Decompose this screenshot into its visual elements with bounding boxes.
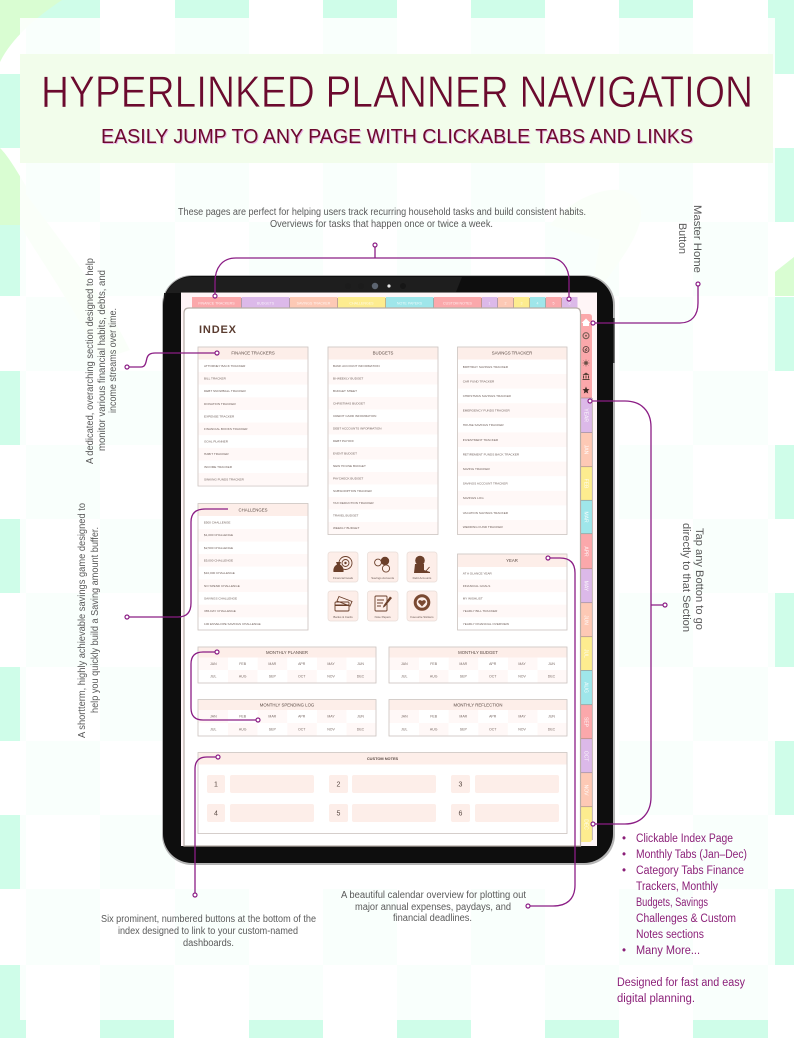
panel: monthly planner: MONTHLY PLANNER bbox=[266, 650, 308, 655]
top tabs bbox=[192, 297, 578, 309]
side tabs: NOV bbox=[582, 785, 588, 796]
panel: custom notes: 2 bbox=[337, 782, 341, 788]
feature list: Monthly Tabs (Jan–Dec) bbox=[636, 849, 747, 861]
panel: monthly planner: JUL bbox=[210, 675, 216, 679]
panel: monthly spending log: JUL bbox=[210, 728, 216, 732]
panel: finance trackers: DONATION TRACKER bbox=[204, 402, 236, 406]
caption: year overview: A beautiful calendar overview for plotting out bbox=[341, 890, 526, 901]
panel: monthly spending log: MONTHLY SPENDING LOG bbox=[260, 702, 315, 707]
panel: monthly planner: SEP bbox=[269, 675, 276, 679]
top caption bbox=[178, 207, 586, 230]
icon button: debt accounts bbox=[407, 552, 437, 582]
feature list: Challenges & Custom bbox=[636, 913, 736, 925]
caption: finance trackers: income streams over time. bbox=[108, 308, 119, 413]
panel: challenges: $500 CHALLENGE bbox=[204, 520, 230, 524]
panel: monthly reflection: DEC bbox=[548, 728, 556, 732]
closing note: Designed for fast and easy bbox=[617, 977, 745, 989]
panel: year: AT A GLANCE YEAR bbox=[463, 571, 493, 575]
panel: monthly planner: AUG bbox=[239, 675, 247, 679]
panel: custom notes: 6 bbox=[459, 810, 463, 818]
connector: custom notes bbox=[193, 755, 220, 897]
top caption: Overviews for tasks that happen once or twice a week. bbox=[270, 219, 493, 230]
panel: monthly reflection: AUG bbox=[430, 728, 438, 732]
top caption: These pages are perfect for helping users track recurring household tasks and build consistent habits. bbox=[178, 207, 586, 218]
index page bbox=[184, 308, 580, 846]
panel: challenges: 365-DAY CHALLENGE bbox=[204, 609, 236, 613]
panel: savings tracker: CAR FUND TRACKER bbox=[463, 379, 495, 383]
panel: finance trackers: BILL TRACKER bbox=[204, 376, 227, 380]
panel: monthly planner: OCT bbox=[298, 675, 306, 679]
panel: monthly planner: DEC bbox=[357, 675, 365, 679]
panel: savings tracker: EMERGENCY FUNDS TRACKER bbox=[463, 409, 510, 413]
icon button: debt accounts: Debt Accounts bbox=[413, 576, 432, 580]
side tabs: MAY bbox=[582, 581, 588, 592]
caption: master home button bbox=[676, 205, 703, 273]
side tabs: AUG bbox=[582, 682, 588, 693]
tablet bbox=[162, 275, 615, 865]
panel: finance trackers: ATTORNEY BACK TRACKER bbox=[204, 364, 246, 368]
closing note: digital planning. bbox=[617, 993, 695, 1005]
panel: year bbox=[458, 554, 567, 630]
panel: budgets: TAX DEDUCTION TRACKER bbox=[333, 501, 374, 505]
panel: monthly reflection: MAY bbox=[518, 715, 526, 719]
feature list: Trackers, Monthly bbox=[636, 881, 718, 893]
panel: monthly budget: SEP bbox=[460, 675, 467, 679]
caption: custom notes: index designed to link to your custom-named bbox=[118, 926, 298, 937]
connector: monthly pages bbox=[191, 650, 260, 722]
panel: monthly budget: JUL bbox=[401, 675, 407, 679]
panel: budgets: CHRISTMAS BUDGET bbox=[333, 401, 365, 405]
panel: monthly planner: JUN bbox=[357, 662, 364, 666]
caption: challenges: help you quickly build a Saving amount buffer. bbox=[90, 527, 101, 713]
panel: monthly spending log: JUN bbox=[357, 715, 364, 719]
caption: custom notes: dashboards. bbox=[183, 938, 234, 949]
panel: custom notes: CUSTOM NOTES bbox=[367, 756, 399, 761]
caption: challenges: A shortterm, highly achievable savings game designed to bbox=[77, 503, 88, 738]
panel: budgets: BI-WEEKLY BUDGET bbox=[333, 377, 363, 381]
panel: savings tracker: INVESTMENT TRACKER bbox=[463, 438, 499, 442]
panel: budgets bbox=[328, 347, 438, 534]
panel: monthly planner: MAR bbox=[268, 662, 277, 666]
panel: monthly budget: FEB bbox=[430, 662, 438, 666]
panel: monthly spending log: AUG bbox=[239, 728, 247, 732]
feature list: Category Tabs Finance bbox=[636, 865, 744, 877]
panel: challenges bbox=[198, 504, 308, 630]
panel: savings tracker: CHRISTMAS SAVINGS TRACKER bbox=[463, 394, 512, 398]
panel: savings tracker: VACATION SAVINGS TRACKER bbox=[463, 511, 509, 515]
panel: monthly budget: DEC bbox=[548, 675, 556, 679]
panel: finance trackers: EXPENSE TRACKER bbox=[204, 414, 235, 418]
caption: section tabs bbox=[680, 523, 705, 632]
panel: budgets: BUDGET SHEET bbox=[333, 389, 357, 393]
panel: challenges: SAVINGS CHALLENGE bbox=[204, 596, 237, 600]
panel: challenges: $1,000 CHALLENGE bbox=[204, 533, 233, 537]
feature list: Notes sections bbox=[636, 929, 704, 941]
panel: savings tracker: SAVINGS LOG bbox=[463, 496, 484, 500]
panel: budgets: PAYCHECK BUDGET bbox=[333, 476, 363, 480]
panel: monthly reflection: MAR bbox=[459, 715, 468, 719]
panel: monthly reflection: SEP bbox=[460, 728, 467, 732]
panel: monthly planner: JAN bbox=[210, 662, 217, 666]
panel: finance trackers: HABIT TRACKER bbox=[204, 452, 229, 456]
connector: finance trackers bbox=[125, 351, 219, 369]
panel: monthly spending log: MAR bbox=[268, 715, 277, 719]
panel: monthly reflection: MONTHLY REFLECTION bbox=[453, 702, 503, 707]
panel: budgets: WEEKLY BUDGET bbox=[333, 526, 359, 530]
caption: year overview: financial deadlines. bbox=[393, 913, 472, 924]
panel: finance trackers: SINKING FUNDS TRACKER bbox=[204, 478, 245, 482]
panel: monthly reflection: OCT bbox=[489, 728, 497, 732]
side tabs: YEAR bbox=[582, 408, 588, 422]
panel: monthly budget: AUG bbox=[430, 675, 438, 679]
panel: budgets: BANK ACCOUNT INFORMATION bbox=[333, 364, 380, 368]
panel: budgets: DEBT PAYOFF bbox=[333, 439, 354, 443]
panel: monthly reflection: JUN bbox=[548, 715, 555, 719]
panel: monthly planner: MAY bbox=[327, 662, 335, 666]
panel: finance trackers bbox=[198, 347, 308, 486]
feature list: Many More... bbox=[636, 945, 700, 957]
panel: monthly reflection: JUL bbox=[401, 728, 407, 732]
panel: custom notes: 5 bbox=[337, 810, 341, 818]
top tabs: NOTE PAPERS bbox=[397, 302, 423, 306]
panel: budgets: DEBT ACCOUNTS INFORMATION bbox=[333, 426, 382, 430]
top tabs: 5 bbox=[552, 302, 554, 306]
panel: monthly reflection: JAN bbox=[401, 715, 408, 719]
connector: year bbox=[526, 556, 575, 908]
feature list: • bbox=[622, 865, 626, 877]
panel: year: FINANCIAL GOALS bbox=[463, 584, 490, 588]
top tabs: 2 bbox=[504, 302, 506, 306]
panel: budgets: EVENT BUDGET bbox=[333, 451, 357, 455]
feature list: • bbox=[622, 833, 626, 845]
panel: savings tracker: SAVINGS ACCOUNT TRACKER bbox=[463, 481, 509, 485]
top tabs: BUDGETS bbox=[257, 302, 275, 306]
panel: finance trackers: GOAL PLANNER bbox=[204, 440, 229, 444]
panel: challenges: 100 ENVELOPE SAVINGS CHALLENGE bbox=[204, 622, 261, 626]
icon button: banks and cards: Banks & Cards bbox=[333, 615, 353, 619]
caption: year overview: major annual expenses, paydays, and bbox=[355, 902, 511, 913]
panel: monthly planner: NOV bbox=[327, 675, 335, 679]
icon button: savings accounts bbox=[368, 552, 398, 582]
caption: finance trackers: A dedicated, overarching section designed to help bbox=[85, 258, 96, 464]
panel: savings tracker: SAVING TRACKER bbox=[463, 467, 491, 471]
caption: section tabs: Tap any Botton to go bbox=[693, 528, 705, 630]
panel: monthly budget bbox=[389, 647, 567, 683]
panel: savings tracker: RETIREMENT FUNDS BACK TRACKER bbox=[463, 452, 520, 456]
top tabs: CHALLENGES bbox=[349, 302, 374, 306]
side tabs: OCT bbox=[582, 751, 588, 761]
side tabs: DEC bbox=[582, 819, 588, 830]
feature list: Clickable Index Page bbox=[636, 833, 733, 845]
side tabs: JAN bbox=[582, 445, 588, 455]
panel: challenges: $5,000 CHALLENGE bbox=[204, 558, 233, 562]
feature list bbox=[622, 833, 747, 957]
panel: monthly reflection: FEB bbox=[430, 715, 438, 719]
panel: monthly budget: OCT bbox=[489, 675, 497, 679]
panel: monthly budget: MAR bbox=[459, 662, 468, 666]
panel: budgets: TRAVEL BUDGET bbox=[333, 514, 359, 518]
connector: master home bbox=[591, 282, 700, 325]
panel: monthly spending log: MAY bbox=[327, 715, 335, 719]
panel: monthly spending log: APR bbox=[298, 715, 306, 719]
caption: custom notes: Six prominent, numbered buttons at the bottom of the bbox=[101, 914, 316, 925]
panel: custom notes: 1 bbox=[214, 782, 218, 788]
panel: monthly spending log: OCT bbox=[298, 728, 306, 732]
panel: monthly reflection bbox=[389, 700, 567, 736]
panel: monthly spending log: SEP bbox=[269, 728, 276, 732]
panel: monthly spending log: NOV bbox=[327, 728, 335, 732]
panel: budgets: BUDGETS bbox=[373, 351, 394, 356]
panel: monthly budget: NOV bbox=[518, 675, 526, 679]
panel: monthly budget: MONTHLY BUDGET bbox=[458, 650, 498, 655]
top tabs: 4 bbox=[536, 302, 538, 306]
icon button: banks and cards bbox=[328, 591, 358, 621]
subtitle: EASILY JUMP TO ANY PAGE WITH CLICKABLE TABS AND LINKS bbox=[101, 125, 693, 148]
icon button: favourite stickers bbox=[407, 591, 437, 621]
screen bbox=[181, 292, 597, 846]
panel: monthly budget: JAN bbox=[401, 662, 408, 666]
panel: monthly planner: FEB bbox=[239, 662, 247, 666]
panel: finance trackers: FINANCIAL BOOKS TRACKER bbox=[204, 427, 248, 431]
caption: section tabs: directly to that Section bbox=[680, 523, 692, 632]
feature list: • bbox=[622, 849, 626, 861]
caption: master home button: Button bbox=[676, 223, 688, 254]
panel: savings tracker: SAVINGS TRACKER bbox=[492, 351, 532, 356]
icon button: financial goals bbox=[328, 552, 358, 582]
panel: year: YEARLY FINANCIAL OVERVIEW bbox=[463, 622, 509, 626]
caption: finance trackers bbox=[85, 258, 119, 464]
connector: top tabs bbox=[213, 243, 571, 301]
icon button: favourite stickers: Favourite Stickers bbox=[410, 615, 434, 619]
caption: custom notes bbox=[101, 914, 316, 949]
panel: monthly budget: JUN bbox=[548, 662, 555, 666]
top tabs: SAVINGS TRACKER bbox=[297, 302, 331, 306]
icon button: note papers: Note Papers bbox=[375, 615, 391, 619]
side tabs: FEB bbox=[582, 479, 588, 489]
caption: year overview bbox=[341, 890, 526, 924]
panel: monthly spending log: FEB bbox=[239, 715, 247, 719]
side tabs: JUL bbox=[582, 649, 588, 658]
panel: monthly reflection: NOV bbox=[518, 728, 526, 732]
panel: savings tracker: HOUSE SAVINGS TRACKER bbox=[463, 423, 504, 427]
panel: custom notes bbox=[198, 752, 567, 834]
panel: monthly budget: MAY bbox=[518, 662, 526, 666]
panel: monthly reflection: APR bbox=[489, 715, 497, 719]
index heading: INDEX bbox=[199, 324, 237, 336]
caption: master home button: Master Home bbox=[691, 205, 703, 273]
panel: monthly planner bbox=[198, 647, 376, 683]
panel: year: YEAR bbox=[506, 558, 518, 563]
panel: finance trackers: FINANCE TRACKERS bbox=[231, 351, 275, 356]
panel: challenges: $2,500 CHALLENGE bbox=[204, 546, 233, 550]
icon button: savings accounts: Savings Accounts bbox=[371, 576, 395, 580]
panel: custom notes: 4 bbox=[214, 810, 218, 818]
panel: monthly spending log bbox=[198, 700, 376, 736]
panel: year: YEARLY BILL TRACKER bbox=[463, 609, 498, 613]
panel: challenges: NO SPEND CHALLENGE bbox=[204, 584, 240, 588]
side tabs bbox=[580, 314, 592, 842]
panel: monthly spending log: DEC bbox=[357, 728, 365, 732]
panel: custom notes: 3 bbox=[459, 782, 463, 788]
panel: savings tracker bbox=[458, 347, 567, 534]
camera bbox=[345, 283, 406, 289]
closing note bbox=[617, 977, 745, 1005]
background: pale green swooshes bbox=[0, 0, 794, 360]
side tab icons bbox=[582, 318, 590, 394]
panel: budgets: CREDIT CARD INFORMATION bbox=[333, 414, 376, 418]
top tabs: FINANCE TRACKERS bbox=[198, 302, 235, 306]
panel: budgets: NEW HOUSE BUDGET bbox=[333, 464, 366, 468]
top tabs: 1 bbox=[488, 302, 490, 306]
panel: budgets: SUBSCRIPTION TRACKER bbox=[333, 489, 373, 493]
caption: finance trackers: monitor various financial habits, debts, and bbox=[97, 270, 108, 451]
side tabs: JUN bbox=[582, 615, 588, 625]
side tabs: SEP bbox=[582, 717, 588, 728]
connector: challenges bbox=[125, 509, 228, 619]
icon button: financial goals: Financial Goals bbox=[333, 576, 354, 580]
top tabs: 3 bbox=[520, 302, 522, 306]
panel: monthly spending log: JAN bbox=[210, 715, 217, 719]
panel: savings tracker: BIRTHDAY SAVINGS TRACKER bbox=[463, 365, 509, 369]
caption: challenges bbox=[77, 503, 101, 738]
panel: monthly budget: APR bbox=[489, 662, 497, 666]
side tabs: MAR bbox=[582, 511, 588, 523]
top tabs: CUSTOM NOTES bbox=[443, 302, 473, 306]
connector: side tabs bbox=[588, 399, 667, 826]
panel: finance trackers: DEBT SNOWBALL TRACKER bbox=[204, 389, 246, 393]
feature list: • bbox=[622, 945, 626, 957]
icon button: note papers bbox=[368, 591, 398, 621]
top tabs: 6 bbox=[568, 302, 570, 306]
header band bbox=[20, 54, 773, 163]
panel: monthly planner: APR bbox=[298, 662, 306, 666]
side tabs: APR bbox=[582, 546, 588, 557]
panel: finance trackers: INCOME TRACKER bbox=[204, 465, 233, 469]
panel: challenges: $10,000 CHALLENGE bbox=[204, 571, 235, 575]
panel: challenges: CHALLENGES bbox=[239, 508, 268, 512]
feature list: Budgets, Savings bbox=[636, 897, 708, 909]
panel: savings tracker: WEDDING FUND TRACKER bbox=[463, 525, 503, 529]
panel: year: MY WISHLIST bbox=[463, 596, 483, 600]
